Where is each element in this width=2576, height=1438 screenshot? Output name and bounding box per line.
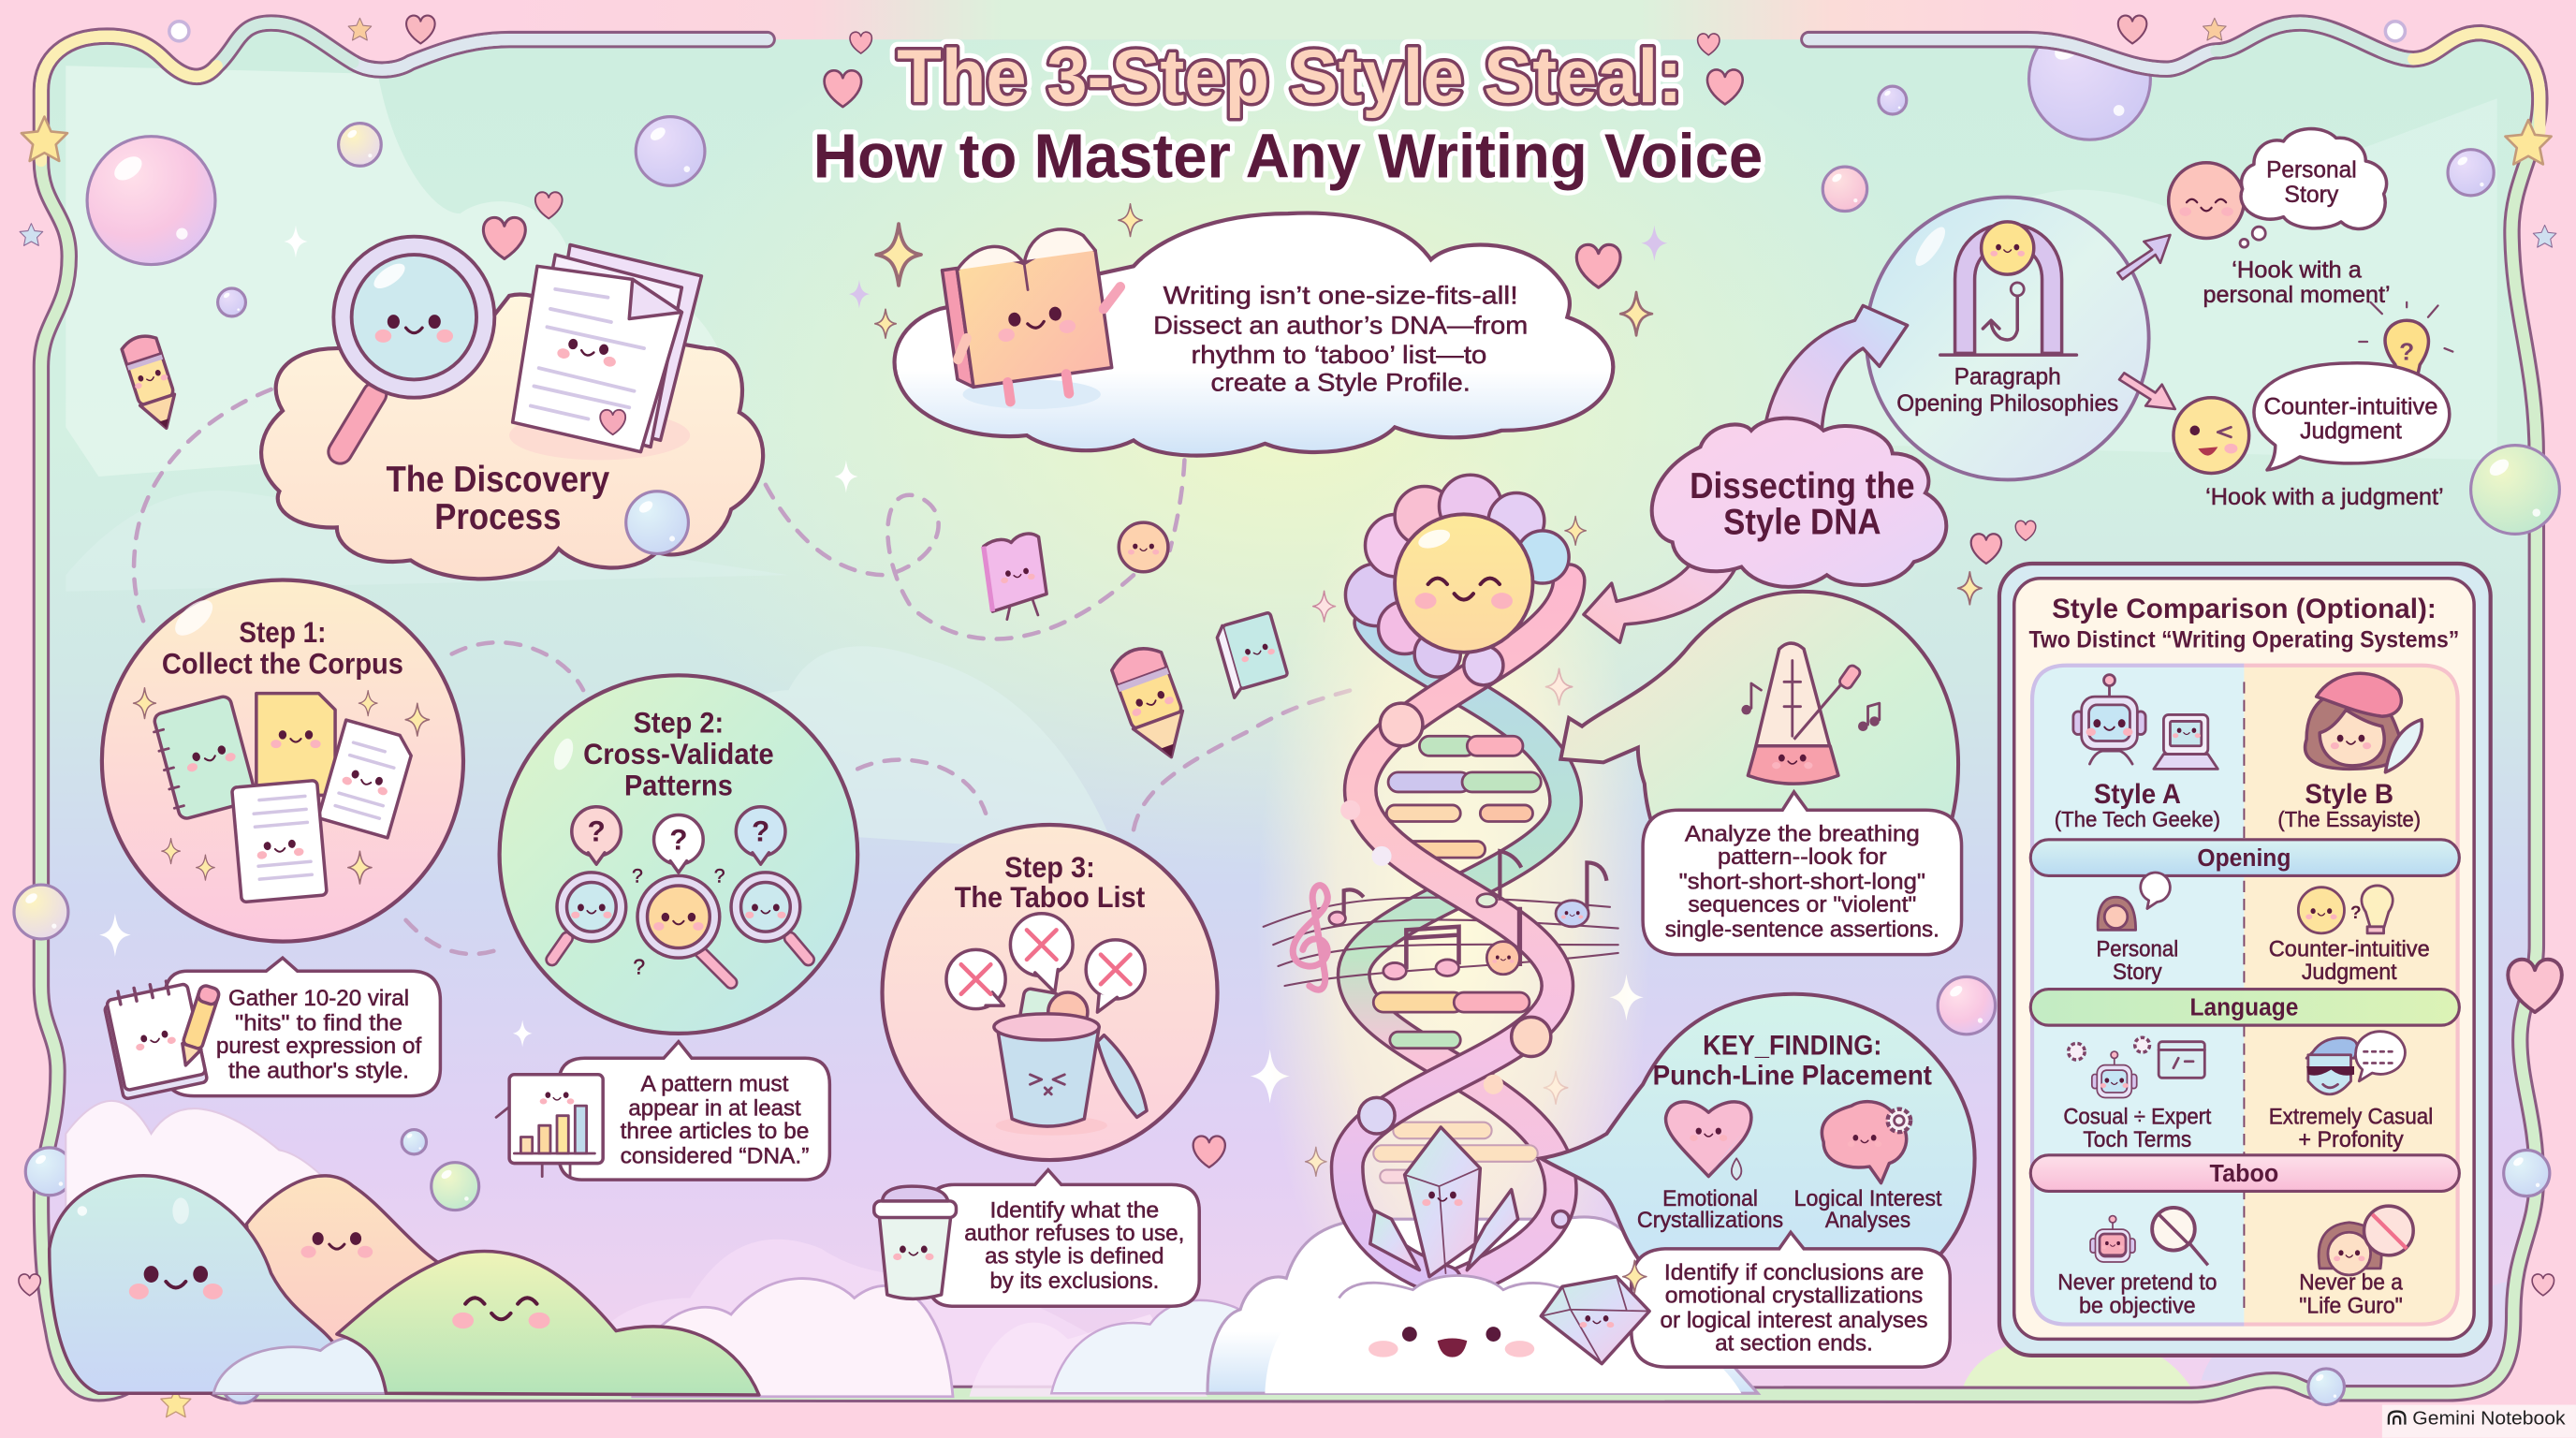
row: opening text (2096, 903, 2430, 985)
heading: the discovery process (386, 460, 610, 537)
title (813, 35, 1763, 192)
step 2 heading: Patterns (624, 768, 733, 801)
callout text: Identify if conclusions are (1664, 1261, 1924, 1285)
intro text: Writing isn’t one-size-fits-all! (1164, 281, 1518, 310)
arrows to hooks (2117, 235, 2175, 409)
cloud: under blobs (213, 1336, 476, 1393)
icon: crystal heart (1666, 1102, 1751, 1180)
comparison heading (2029, 594, 2459, 653)
heading: the discovery process: Process (434, 497, 561, 537)
column labels (2055, 779, 2421, 831)
panel: step 2 (500, 675, 857, 1034)
row: taboo text (2057, 1271, 2404, 1318)
title: How to Master Any Writing Voice (813, 123, 1763, 192)
hook caption: ‘Hook with a (2232, 258, 2362, 284)
strand: blue-green (1354, 623, 1566, 1290)
strand knobs (1340, 703, 1569, 1227)
arrow: left to DNA (1584, 550, 1740, 642)
comparison heading: Style Comparison (Optional): (2052, 594, 2437, 624)
row: taboo text: be objective (2079, 1294, 2196, 1318)
intro text: Dissect an author’s DNA—from (1153, 310, 1528, 339)
row bar: opening (2030, 840, 2459, 875)
icon: treble clef (1293, 886, 1327, 990)
icon: style B essayist (2305, 673, 2422, 772)
cloud with face (1265, 1275, 1741, 1393)
row: taboo text: Never be a (2299, 1271, 2404, 1296)
step 3 heading (955, 850, 1146, 914)
back cloud behind DNA (1208, 1217, 1758, 1393)
step 1 heading (162, 615, 403, 681)
row bar: taboo: Taboo (2210, 1159, 2278, 1187)
question marks: ? (714, 865, 725, 887)
icon: magnifying glass (333, 237, 494, 452)
panel: step 1 (102, 580, 463, 942)
intro text (1153, 281, 1528, 397)
callout text: A pattern must (641, 1072, 789, 1096)
row: language text: + Profonity (2298, 1128, 2404, 1152)
question marks: ? (632, 865, 643, 887)
music notes (1293, 851, 1606, 990)
panel: intro cloud (895, 213, 1613, 456)
callout: rhythm text (1643, 792, 1962, 955)
question marks: ? (669, 822, 688, 856)
icon: magnifiers with question bubbles (552, 807, 809, 983)
paragraph label: Opening Philosophies (1896, 391, 2118, 417)
icon: brain with gear (1822, 1102, 1910, 1183)
arrow: up to paragraph philosophies (1764, 305, 1908, 431)
watermark (2382, 1405, 2576, 1438)
callout text: Gather 10-20 viral (228, 987, 409, 1011)
callout text (216, 987, 422, 1083)
row: language icons (2069, 1032, 2405, 1097)
hook: counter-intuitive judgment (2174, 302, 2452, 510)
icon: lightbulb: ? (2399, 337, 2414, 365)
icon: winking face (2169, 163, 2244, 238)
heading: the discovery process: The Discovery (386, 460, 610, 500)
key finding labels: Crystallizations (1637, 1209, 1783, 1233)
callout: rhythm text: sequences or "violent" (1688, 893, 1916, 917)
row: opening text: Personal (2096, 937, 2178, 961)
icon: yellow note (256, 694, 335, 795)
intro text: rhythm to ‘taboo’ list—to (1191, 340, 1486, 369)
step 2 heading: Cross-Validate (583, 737, 774, 770)
callout: step 2 (496, 1042, 829, 1180)
hook caption: personal moment’ (2203, 283, 2391, 308)
speech bubble (2254, 363, 2450, 470)
icon: peach dot (1119, 522, 1168, 572)
row: opening text: Judgment (2302, 961, 2397, 985)
row: opening text: ? (2350, 903, 2362, 923)
speech bubble: Judgment (2300, 419, 2402, 445)
paragraph label: Paragraph (1954, 365, 2061, 390)
hook: personal story (2169, 129, 2391, 308)
thought cloud: Story (2284, 183, 2339, 208)
step 2 heading (583, 706, 774, 801)
row: opening text: Counter-intuitive (2269, 937, 2430, 961)
callout text: appear in at least (628, 1097, 801, 1122)
key finding labels (1637, 1187, 1942, 1233)
staff lines (1264, 898, 1618, 986)
icon: arch with hook (1940, 222, 2076, 355)
column labels: (The Tech Geeke) (2055, 807, 2220, 831)
heading: dissecting the style DNA: Style DNA (1723, 502, 1881, 542)
panel: discovery process cloud (261, 237, 763, 579)
arrows from dissecting cloud (1584, 305, 1908, 642)
blob: orange (246, 1176, 457, 1388)
dashed journey paths (134, 389, 1357, 954)
column labels: (The Essayiste) (2277, 807, 2421, 831)
icon: pencil (120, 331, 183, 433)
icon: pink mini book (983, 532, 1049, 622)
bottom-left clouds and blobs (50, 1101, 1298, 1397)
callout text: author refuses to use, (964, 1222, 1184, 1246)
row bar: opening: Opening (2197, 844, 2291, 872)
rungs (1373, 736, 1541, 1183)
key finding labels: Emotional (1662, 1187, 1758, 1211)
floating mini book and dot characters (983, 522, 1290, 766)
callout: rhythm text: "short-short-short-long" (1679, 870, 1925, 894)
row: taboo text: "Life Guro" (2299, 1294, 2403, 1318)
panel: paragraph opening philosophies (1866, 198, 2149, 479)
row: taboo icons (2090, 1206, 2413, 1275)
blob: green (337, 1251, 759, 1395)
callout: rhythm text: Analyze the breathing (1685, 823, 1920, 847)
thought cloud (2240, 129, 2387, 247)
row: language text: Extremely Casual (2269, 1105, 2433, 1129)
question marks: ? (752, 814, 769, 848)
column labels: Style A (2094, 779, 2181, 810)
callout text (1661, 1261, 1928, 1357)
icon: front page (232, 780, 327, 902)
speech bubble: Counter-intuitive (2263, 394, 2438, 419)
watermark: Gemini Notebook (2412, 1409, 2566, 1430)
thought cloud: Personal (2266, 158, 2357, 183)
heading: dissecting the style DNA: Dissecting the (1690, 466, 1915, 506)
callout text: "hits" to find the (235, 1011, 402, 1035)
column labels: Style B (2305, 779, 2393, 810)
title: The 3-Step Style Steal: (897, 35, 1682, 119)
row bar: language (2030, 990, 2459, 1025)
icon: lightbulb (2359, 302, 2452, 388)
icon: coffee cup (874, 1186, 956, 1299)
panel: style comparison (1999, 564, 2491, 1356)
callout text: three articles to be (621, 1120, 809, 1144)
icon: trash can (994, 988, 1147, 1136)
callout text: Identify what the (989, 1198, 1159, 1223)
icon: wink face (2174, 398, 2249, 473)
sparkles (134, 688, 429, 884)
callout: key finding (1541, 1232, 1950, 1367)
step 1 heading: Collect the Corpus (162, 647, 403, 681)
icon: pencil 2 (1108, 641, 1196, 766)
callout text (964, 1198, 1184, 1294)
callout: step 3 (874, 1170, 1199, 1306)
key finding heading: Punch-Line Placement (1653, 1060, 1932, 1091)
key finding labels: Logical Interest (1794, 1187, 1942, 1211)
row bar: taboo (2030, 1155, 2459, 1191)
icon: notepad and pencil (102, 971, 239, 1099)
row: opening icons (2098, 873, 2393, 933)
icon: book character (939, 222, 1134, 408)
callout text: the author's style. (228, 1059, 409, 1083)
icon: diamond (1541, 1260, 1649, 1364)
icon: document stack (513, 244, 701, 452)
bubbles behind frame (2027, 49, 2152, 141)
question marks (587, 814, 769, 979)
icon: flower (1345, 475, 1569, 685)
callout: rhythm text: single-sentence assertions. (1665, 917, 1939, 942)
panel: key finding bubble (1541, 994, 1975, 1265)
title: The 3-Step Style Steal: (897, 35, 1682, 119)
strand: pink (1347, 580, 1569, 1282)
panel: dissecting the style DNA cloud (1652, 418, 1946, 587)
icon: metronome (1741, 643, 1880, 784)
icon: style A robot and laptop (2073, 675, 2217, 769)
icon: tilted page (318, 720, 416, 838)
key finding heading (1653, 1031, 1932, 1091)
callout text: as style is defined (985, 1245, 1164, 1269)
row: opening text: Story (2113, 961, 2162, 985)
question marks: ? (587, 814, 606, 848)
panel: rhythm bubble (1560, 592, 1962, 955)
callout text: purest expression of (216, 1034, 422, 1059)
icon: crystal cluster (1370, 1127, 1518, 1277)
hook caption (2203, 258, 2391, 308)
intro text: create a Style Profile. (1211, 368, 1471, 397)
dna glow (1257, 444, 1651, 1397)
step 2 heading: Step 2: (634, 706, 724, 740)
row bar: language: Language (2190, 993, 2298, 1021)
row: taboo text: Never pretend to (2057, 1271, 2217, 1296)
row: language text (2063, 1105, 2433, 1152)
callout text (621, 1072, 810, 1169)
step 1 heading: Step 1: (239, 615, 326, 649)
row: language text: Cosual ÷ Expert (2063, 1105, 2212, 1129)
step 3 heading: Step 3: (1004, 850, 1095, 884)
icon: chart character (496, 1075, 603, 1177)
callout text: omotional crystallizations (1665, 1284, 1923, 1309)
heading: dissecting the style DNA (1690, 466, 1915, 542)
icon: eighth notes (1329, 851, 1606, 979)
step 3 heading: The Taboo List (955, 880, 1146, 914)
callout: step 1 (102, 958, 440, 1099)
icon: crossed-out speech bubbles (946, 914, 1145, 1012)
icon: notebook (150, 695, 257, 821)
callout text: or logical interest analyses (1661, 1309, 1928, 1333)
row: language text: Toch Terms (2083, 1128, 2191, 1152)
comparison heading: Two Distinct “Writing Operating Systems” (2029, 627, 2459, 653)
blob: blue (50, 1176, 394, 1393)
icon: blue mini book (1214, 612, 1290, 697)
callout text: considered “DNA.” (621, 1145, 810, 1169)
callout text: by its exclusions. (989, 1269, 1159, 1294)
question marks: ? (633, 955, 645, 979)
table columns (2032, 666, 2458, 1325)
key finding labels: Analyses (1825, 1209, 1910, 1233)
panel: step 3 (883, 825, 1218, 1160)
chart: DNA helix (1264, 475, 1618, 1290)
paragraph label (1896, 365, 2118, 417)
hook caption: ‘Hook with a judgment’ (2205, 485, 2444, 510)
callout text: at section ends. (1715, 1332, 1873, 1357)
callout: rhythm text: pattern--look for (1718, 845, 1887, 870)
key finding heading: KEY_FINDING: (1703, 1031, 1881, 1062)
